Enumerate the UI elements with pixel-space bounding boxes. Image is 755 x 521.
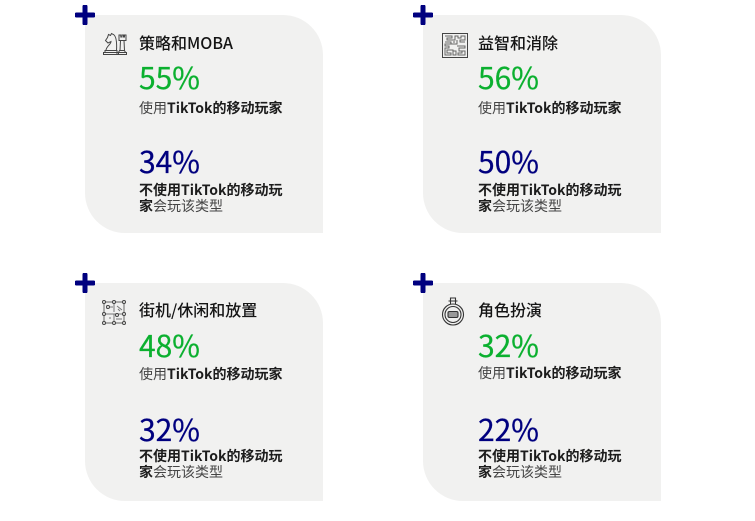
label: users: 使用TikTok的移动玩家 bbox=[478, 363, 622, 383]
label: non-users: 不使用TikTok的移动玩 bbox=[139, 180, 283, 200]
panel: arcade, casual and idle bbox=[85, 283, 323, 501]
stat: 56%: 56% bbox=[478, 54, 539, 98]
label: users: 使用TikTok的移动玩家 bbox=[139, 364, 283, 384]
label: non-users: 家会玩该类型 bbox=[139, 462, 223, 482]
heading: arcade, casual and idle: 街机/休闲和放置 bbox=[139, 297, 257, 321]
label: non-users: 家会玩该类型 bbox=[478, 196, 562, 216]
label: non-users: 不使用TikTok的移动玩 bbox=[139, 446, 283, 466]
panel: puzzle and match bbox=[423, 15, 661, 233]
label: users: 使用TikTok的移动玩家 bbox=[478, 98, 622, 118]
label: non-users bbox=[139, 446, 283, 482]
stat: 32%: 32% bbox=[139, 406, 200, 450]
panel: role playing bbox=[423, 283, 661, 501]
icon: maze bbox=[442, 33, 468, 58]
heading: puzzle and match: 益智和消除 bbox=[478, 30, 558, 54]
label: non-users: 不使用TikTok的移动玩 bbox=[478, 446, 622, 466]
stat: 48%: 48% bbox=[139, 322, 200, 366]
label: users: 使用TikTok的移动玩家 bbox=[139, 98, 283, 118]
plus marker: arcade bbox=[75, 273, 95, 293]
icon: chess pieces bbox=[103, 32, 127, 55]
stat: 22%: 22% bbox=[478, 406, 539, 450]
stat: 50%: 50% bbox=[478, 138, 539, 182]
stat: 55%: 55% bbox=[139, 54, 200, 98]
plus marker: role playing bbox=[413, 273, 433, 293]
stat: 34%: 34% bbox=[139, 138, 200, 182]
label: non-users bbox=[139, 180, 283, 216]
label: non-users: 不使用TikTok的移动玩 bbox=[478, 180, 622, 200]
stat: 32%: 32% bbox=[478, 322, 539, 366]
panel: strategy and MOBA bbox=[85, 15, 323, 233]
plus marker: strategy bbox=[75, 5, 95, 25]
label: non-users: 家会玩该类型 bbox=[139, 196, 223, 216]
heading: role playing: 角色扮演 bbox=[478, 297, 542, 321]
plus marker: puzzle bbox=[413, 5, 433, 25]
label: non-users: 家会玩该类型 bbox=[478, 462, 562, 482]
heading: strategy and MOBA: 策略和MOBA bbox=[139, 30, 233, 54]
label: non-users bbox=[478, 446, 622, 482]
icon: potion bottle bbox=[442, 298, 464, 326]
icon: circuit grid bbox=[102, 300, 126, 325]
label: non-users bbox=[478, 180, 622, 216]
